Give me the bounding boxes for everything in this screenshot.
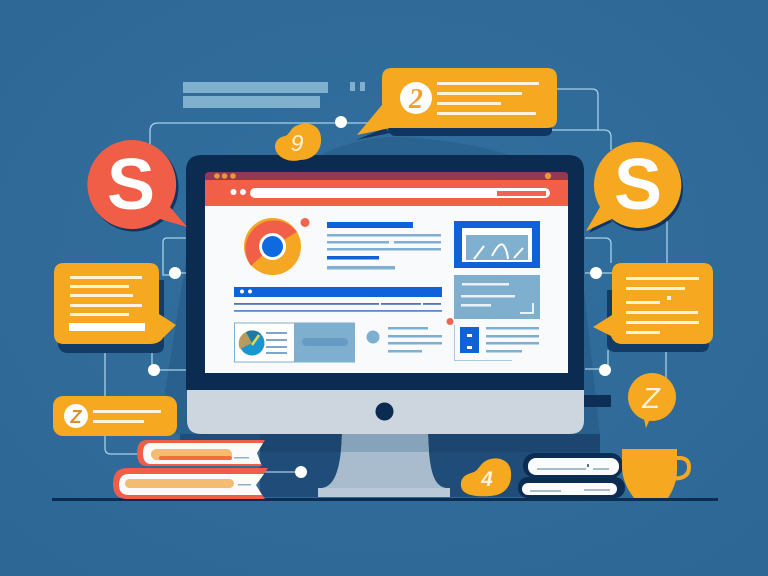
top message bubble (356, 68, 557, 140)
browser logo (244, 218, 310, 275)
info card (454, 275, 540, 319)
book stack left (113, 440, 268, 499)
icon: badge in bubble: 2 (408, 84, 423, 115)
left message card (54, 263, 176, 353)
connector lines (105, 89, 667, 472)
icon: badge in bubble (400, 82, 432, 115)
camera dot (376, 402, 394, 420)
lower left label card (53, 396, 177, 436)
baseline shelf (52, 498, 718, 501)
section bar (234, 287, 442, 312)
chart card (454, 221, 540, 268)
text block (327, 222, 441, 270)
monitor chin (187, 390, 584, 434)
number 9 badge: 9 (291, 130, 304, 156)
top book (137, 440, 265, 466)
monitor bezel (186, 155, 584, 390)
list with circle (366, 327, 442, 352)
side port (584, 395, 611, 407)
red S bubble: S (107, 145, 155, 225)
browser title bar (205, 172, 568, 206)
monitor cast shadow (165, 137, 600, 497)
heart badge (461, 458, 511, 496)
number badge right: Z (641, 383, 661, 415)
connector nodes (148, 116, 611, 478)
orange S bubble: S (614, 145, 662, 225)
number badge right (628, 373, 676, 428)
heart badge: 4 (480, 468, 493, 491)
right message card (593, 263, 713, 352)
bottom book (113, 468, 268, 499)
document list (446, 318, 539, 360)
lower left label card: Z (70, 407, 82, 427)
number 9 badge (275, 124, 321, 161)
white book stack (518, 453, 625, 498)
monitor (186, 155, 611, 497)
orange S bubble (586, 142, 683, 233)
coffee cup (622, 449, 689, 498)
top header bars (183, 82, 365, 108)
pie chart card (234, 323, 355, 362)
stand (318, 434, 450, 497)
red S bubble (87, 140, 187, 232)
screen (205, 172, 568, 373)
